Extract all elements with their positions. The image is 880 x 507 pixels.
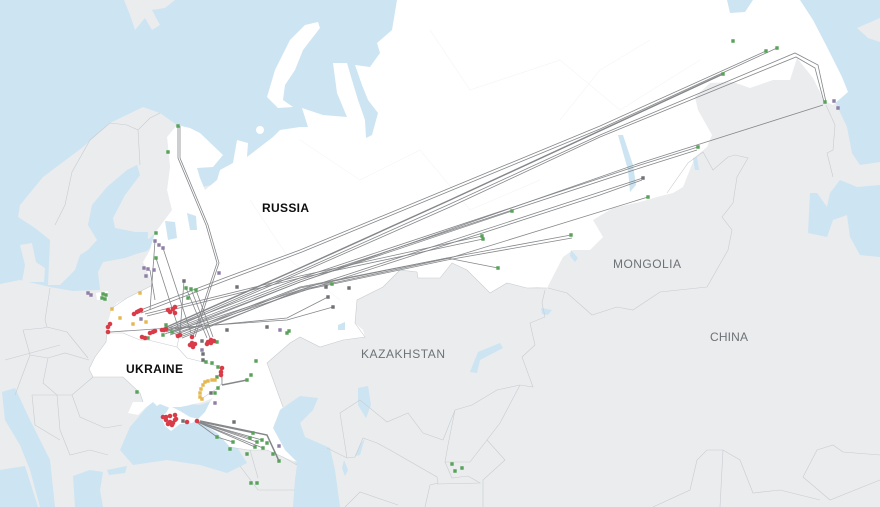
sea: Mediterranean: [0, 466, 38, 507]
white: Russia and Belarus: [107, 0, 848, 462]
label: Ukraine: UKRAINE: [126, 362, 183, 376]
label: Mongolia: MONGOLIA: [613, 257, 681, 271]
sea: Gulf of Finland: [100, 233, 155, 262]
markers: gray sites: [183, 178, 643, 422]
sea: Caspian: [273, 396, 340, 507]
label: Kazakhstan: KAZAKHSTAN: [361, 347, 445, 361]
land: Scandinavia: [18, 107, 177, 285]
sea: Pacific: [810, 0, 880, 165]
label: China: CHINA: [710, 330, 748, 344]
sea: Marmara: [107, 466, 127, 475]
routes: long-range lines to Siberia and the Far East: [110, 48, 826, 338]
faint rivers and regional lines in Russia: [250, 30, 700, 300]
white: Crimea: [161, 406, 199, 431]
markers: red strikes: [108, 307, 222, 425]
sea: Yellow Sea: [808, 180, 880, 257]
markers: purple sites: [88, 101, 838, 446]
land: Svalbard: [124, 0, 175, 30]
sea: Black Sea: [120, 400, 247, 473]
white: Kaliningrad: [96, 291, 108, 300]
routes: northern lines from Kola and Saint Petersburg: [150, 126, 219, 338]
country borders: [5, 105, 880, 507]
land: Sakhalin: [857, 18, 880, 42]
land: Denmark: [20, 243, 45, 282]
routes: Donbas and Caucasus lines: [195, 373, 279, 461]
markers: orange sites and front-line arc: [112, 293, 215, 399]
sea: Adriatic: [2, 388, 55, 507]
lakes: [165, 0, 753, 476]
label: Russia: RUSSIA: [262, 201, 309, 215]
white: Novaya Zemlya: [267, 22, 320, 108]
sea: Aegean: [73, 470, 103, 507]
markers: green sites: [102, 41, 825, 483]
white: small Arctic island: [256, 126, 264, 134]
white: Ukraine: [89, 333, 222, 415]
